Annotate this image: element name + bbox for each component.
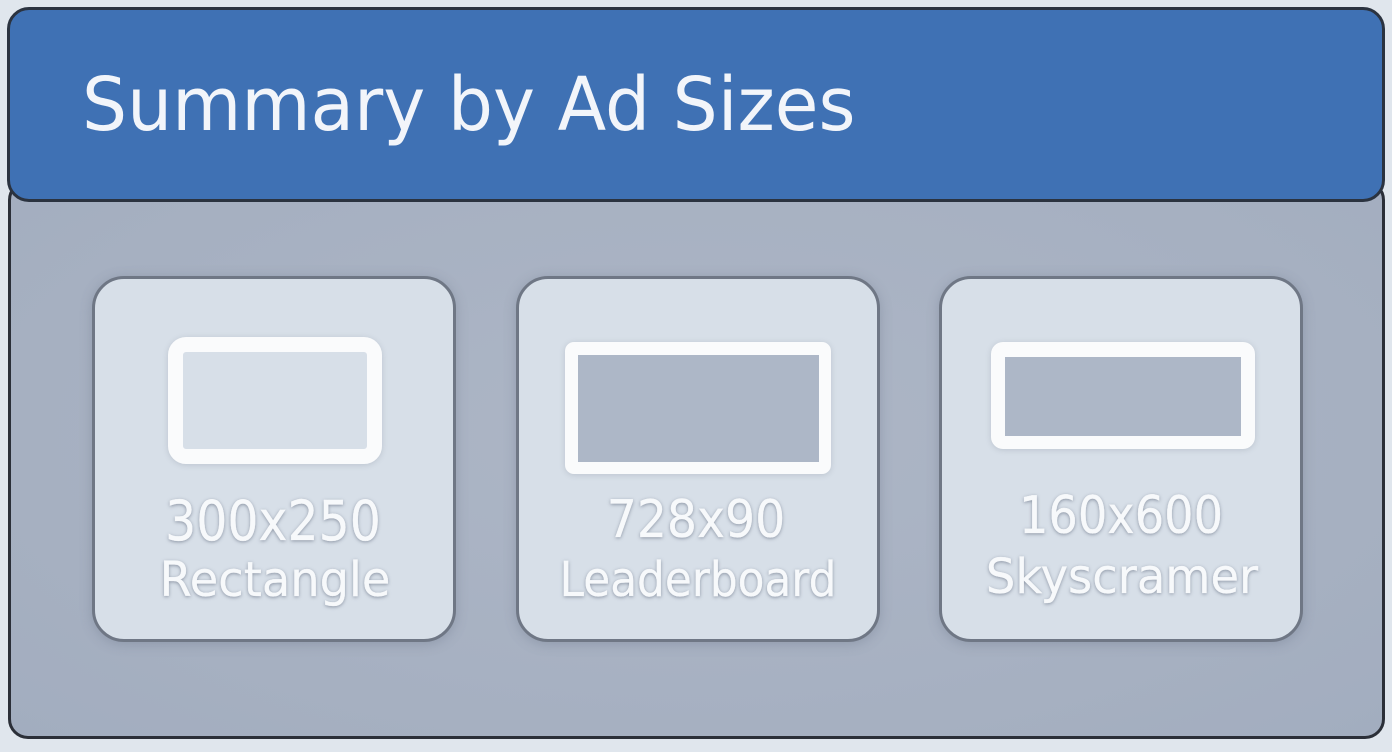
- panel: 160x600 skyscraper card: [939, 276, 1303, 642]
- icon: rectangle outline: [168, 337, 382, 464]
- panel: 728x90 leaderboard card: [516, 276, 880, 642]
- label: 300x250 Rectangle: Rectangle: [160, 552, 390, 608]
- label: 300x250 Rectangle: 300x250: [165, 489, 381, 553]
- title: Summary by Ad Sizes: [82, 62, 855, 148]
- panel: body background: [8, 180, 1385, 739]
- icon: skyscraper outline: [991, 342, 1255, 449]
- label: 160x600 Skyscramer: Skyscramer: [986, 549, 1258, 605]
- panel: 300x250 rectangle card: [92, 276, 456, 642]
- label: 728x90 Leaderboard: Leaderboard: [559, 552, 836, 608]
- label: 728x90 Leaderboard: [559, 490, 836, 608]
- label: 160x600 Skyscramer: [986, 486, 1260, 606]
- icon: leaderboard outline: [565, 342, 831, 474]
- label: 300x250 Rectangle: [160, 489, 390, 609]
- header banner: [7, 7, 1385, 202]
- label: 160x600 Skyscramer: 160x600: [1019, 486, 1223, 546]
- label: 728x90 Leaderboard: 728x90: [607, 490, 785, 550]
